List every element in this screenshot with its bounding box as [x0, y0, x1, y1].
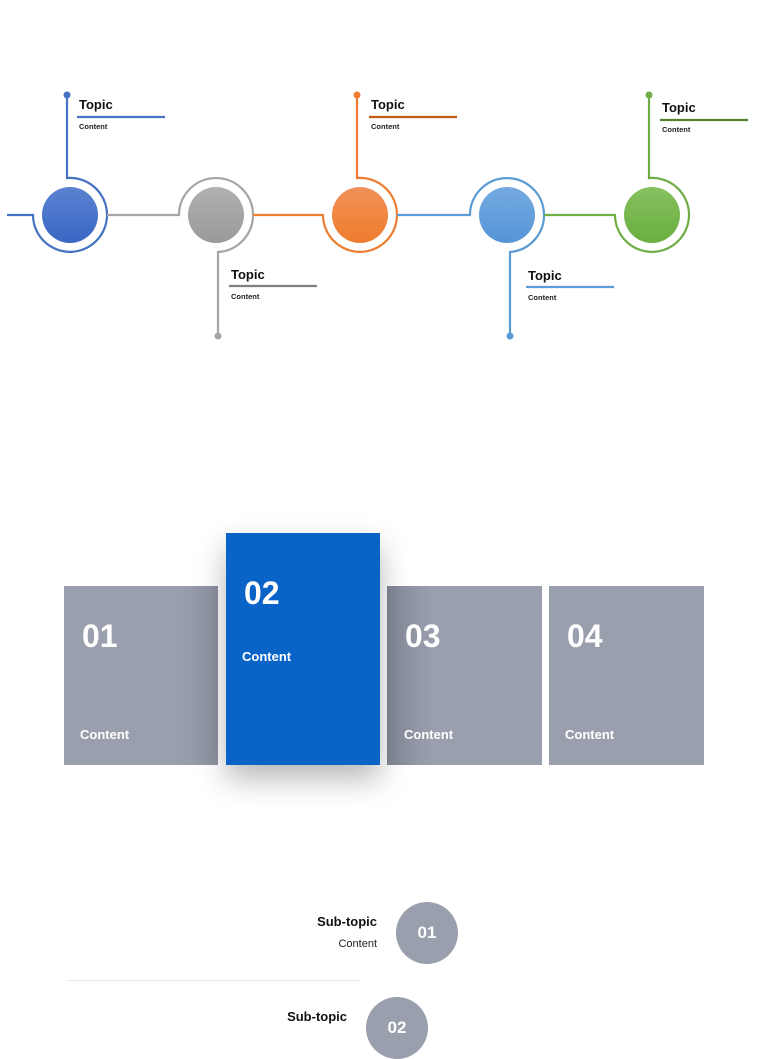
subtopic 01 [317, 902, 458, 964]
node 1 blue: Topic [79, 97, 113, 112]
card 04: Content [565, 727, 614, 742]
node 4 light blue [397, 178, 614, 340]
node 4 light blue: Content [528, 293, 557, 302]
circle 01: 01 [418, 923, 436, 942]
card 04 [549, 586, 704, 765]
circle 02 [366, 997, 428, 1059]
card 03: 03 [405, 618, 441, 654]
node 2 gray: Topic [231, 267, 265, 282]
card 01: 01 [82, 618, 118, 654]
node 3 orange [253, 92, 457, 252]
timeline [7, 92, 748, 340]
card 02 highlighted [226, 533, 380, 765]
circle 01 [396, 902, 458, 964]
node 2 gray: Content [231, 292, 260, 301]
card 01: Content [80, 727, 129, 742]
node 5 green: Topic [662, 100, 696, 115]
card 02 highlighted: Content [242, 649, 291, 664]
node 1 blue [7, 92, 165, 252]
node 3 orange: Content [371, 122, 400, 131]
node 1 blue: Content [79, 122, 108, 131]
subtopic 02 [287, 997, 428, 1059]
card 04: 04 [567, 618, 603, 654]
node 5 green: Content [662, 125, 691, 134]
card 03: Content [404, 727, 453, 742]
card 02 highlighted: 02 [244, 575, 280, 611]
node 3 orange: Topic [371, 97, 405, 112]
node 4 light blue: Topic [528, 268, 562, 283]
circle 02: 02 [388, 1018, 406, 1037]
card 03 [387, 586, 542, 765]
subtopic 02: Sub-topic [287, 1009, 347, 1024]
node 2 gray [107, 178, 317, 340]
node 5 green [544, 92, 748, 252]
subtopic 01: Sub-topic [317, 914, 377, 929]
subtopic 01: Content [338, 938, 377, 950]
card 01 [64, 586, 218, 765]
